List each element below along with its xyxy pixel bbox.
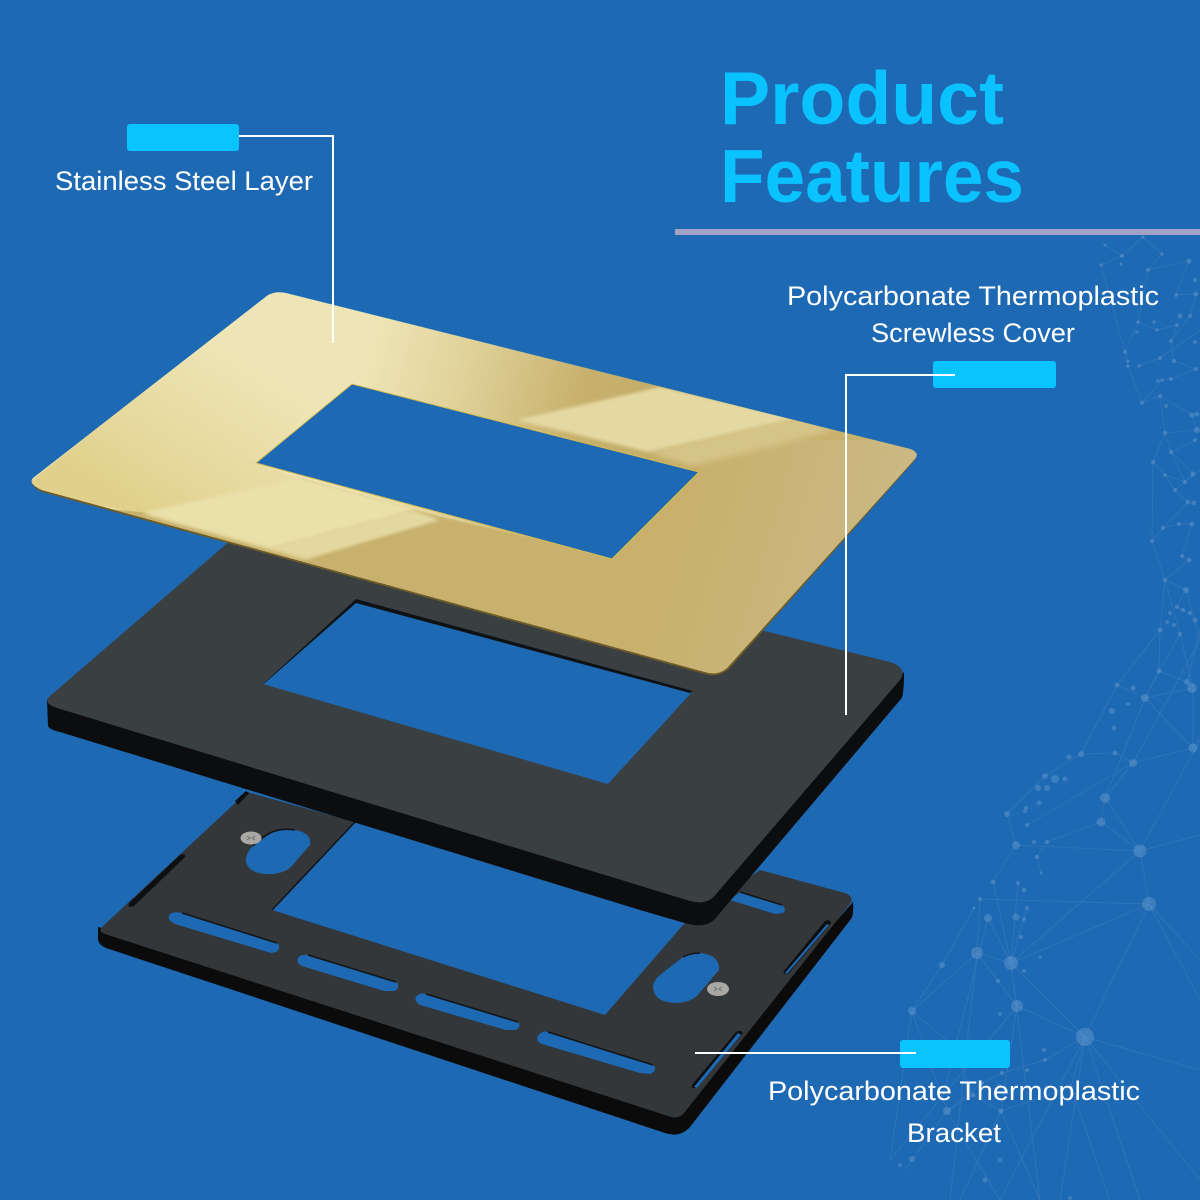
bracket plate: [98, 791, 853, 1135]
title: Features: [720, 134, 1024, 218]
bracket side slot: right lower: [692, 1031, 743, 1088]
callout text: [787, 281, 1159, 348]
bracket side slot: right upper: [784, 920, 831, 974]
callout text: Stainless Steel Layer: [55, 166, 313, 196]
callout leader: [695, 1052, 916, 1054]
callout text: Screwless Cover: [871, 318, 1075, 348]
title: [720, 56, 1024, 218]
callout leader: [846, 375, 955, 715]
stainless gold plate: [20, 290, 930, 690]
title: Product: [720, 56, 1004, 140]
cover hole inner wall: [263, 599, 693, 693]
bracket underside edge: [98, 902, 853, 1135]
title divider: [675, 229, 1200, 235]
callout: screwless cover: [787, 281, 1159, 715]
callout text: Polycarbonate Thermoplastic: [768, 1076, 1140, 1106]
bracket side slot: upper left: [235, 791, 249, 805]
callout pill: [127, 124, 239, 151]
gold thin edge: [31, 458, 917, 675]
callout: bracket: [695, 1040, 1140, 1148]
bracket side slot: left: [129, 854, 185, 907]
callout text: Bracket: [907, 1118, 1001, 1148]
cover underside edge: [47, 672, 904, 925]
bracket hole inner walls: [182, 822, 782, 1065]
screw: left: [240, 832, 262, 844]
gold face: [32, 292, 917, 673]
cover face: [47, 515, 902, 902]
callout pill: [933, 361, 1056, 388]
gold hole rim: [256, 384, 699, 559]
callout leader: [239, 136, 333, 343]
callout text: [768, 1076, 1140, 1148]
network texture: [890, 235, 1200, 1200]
callout text: Polycarbonate Thermoplastic: [787, 281, 1159, 311]
callout pill: [900, 1040, 1010, 1068]
bracket face: [100, 792, 852, 1117]
dark cover plate: [47, 515, 904, 925]
callout: stainless steel layer: [55, 124, 333, 343]
screw: right: [707, 982, 729, 996]
gold reflections: [32, 358, 917, 674]
